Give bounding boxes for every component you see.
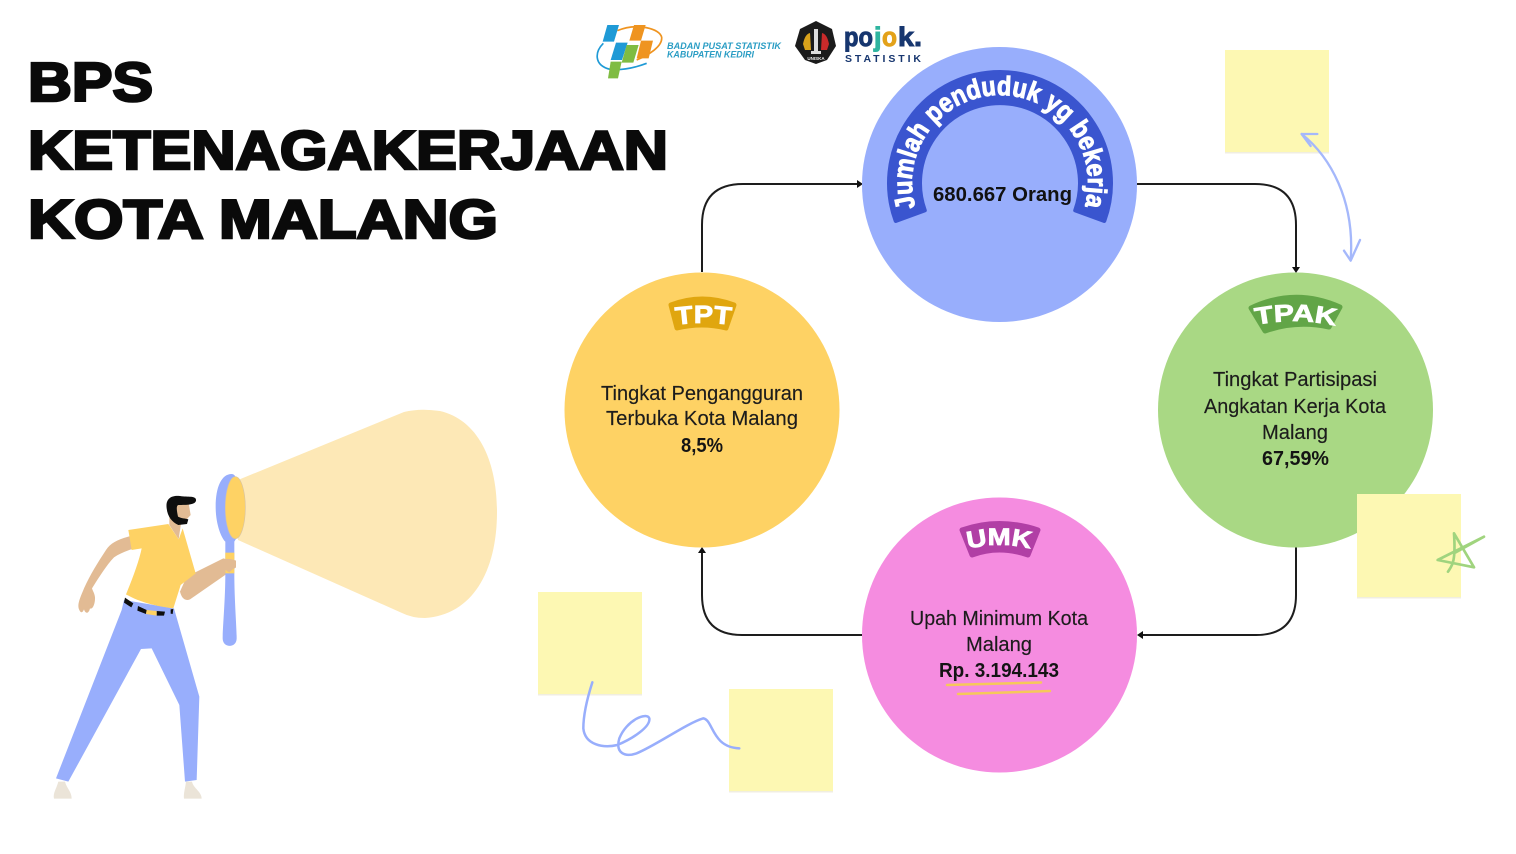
description: 67,59%	[1262, 448, 1329, 470]
title: BPS	[28, 51, 153, 113]
arrow: bottom circle to left circle	[698, 547, 862, 635]
illustration: person with magnifying glass	[54, 474, 245, 799]
curved banner	[889, 72, 1111, 221]
neck	[169, 510, 182, 539]
sticky note: lower left	[538, 592, 642, 696]
logo: Pojok Statistik: k.	[898, 22, 922, 52]
description	[1204, 369, 1387, 470]
arrow: right circle to bottom circle	[1137, 547, 1296, 639]
sticky note: top right	[1225, 50, 1329, 154]
description	[601, 383, 803, 457]
feet	[54, 782, 72, 799]
value underline	[947, 682, 1050, 694]
title: KETENAGAKERJAAN	[28, 119, 668, 181]
logo: Pojok Statistik	[844, 22, 922, 65]
logo: Pojok Statistik: o	[882, 22, 897, 52]
panel: TPAK	[1158, 272, 1433, 548]
description: Tingkat Partisipasi	[1213, 369, 1377, 391]
panel: UMK	[862, 498, 1137, 772]
shirt	[126, 524, 196, 608]
badge label: UMK	[966, 528, 1034, 549]
description: 8,5%	[681, 435, 723, 457]
panel: jumlah penduduk yang bekerja	[862, 47, 1137, 322]
logo: Pojok Statistik: j	[873, 22, 882, 52]
doodle: double-headed arrow	[1302, 134, 1360, 261]
description: Terbuka Kota Malang	[606, 408, 798, 430]
description: Rp. 3.194.143	[939, 660, 1059, 682]
title	[28, 51, 668, 250]
head and hair	[175, 498, 191, 519]
value: 680.667 Orang	[933, 184, 1072, 206]
trousers	[56, 600, 199, 782]
logo: BPS Kabupaten Kediri: BADAN PUSAT STATISTIK	[667, 41, 782, 52]
badge label: TPT	[674, 305, 733, 324]
badge: TPAK	[1251, 297, 1340, 331]
description: Malang	[1262, 422, 1328, 444]
logo: Unisba seal: UNISKA	[807, 56, 825, 61]
badge: UMK	[962, 524, 1038, 555]
title: KOTA MALANG	[28, 188, 498, 250]
arrow: top circle to right circle	[1137, 184, 1300, 273]
logo: Pojok Statistik: po	[844, 22, 873, 52]
illustration: flashlight beam	[238, 410, 497, 618]
description: Tingkat Pengangguran	[601, 383, 803, 405]
sticky note: lower right	[1357, 494, 1461, 598]
banner label: Jumlah penduduk yg bekerja	[894, 75, 1108, 209]
logo: BPS Kabupaten Kediri	[597, 25, 782, 78]
magnifying glass	[216, 474, 241, 646]
badge: TPT	[671, 299, 734, 328]
front arm	[180, 558, 236, 600]
description: Malang	[966, 634, 1032, 656]
panel: TPT	[564, 272, 840, 548]
arrow: left circle to top circle	[702, 180, 863, 272]
doodle: star	[1438, 533, 1484, 572]
belt	[124, 598, 173, 616]
description: Upah Minimum Kota	[910, 608, 1089, 630]
sticky note: bottom centre	[729, 689, 833, 792]
logo: Pojok Statistik: STATISTIK	[845, 53, 921, 65]
badge label: TPAK	[1253, 304, 1338, 326]
logo: BPS Kabupaten Kediri: KABUPATEN KEDIRI	[667, 50, 754, 60]
doodle: squiggle	[583, 682, 739, 755]
logo: Unisba seal	[795, 21, 836, 64]
back arm	[78, 536, 133, 613]
description: Angkatan Kerja Kota	[1204, 396, 1387, 418]
description	[910, 608, 1089, 682]
